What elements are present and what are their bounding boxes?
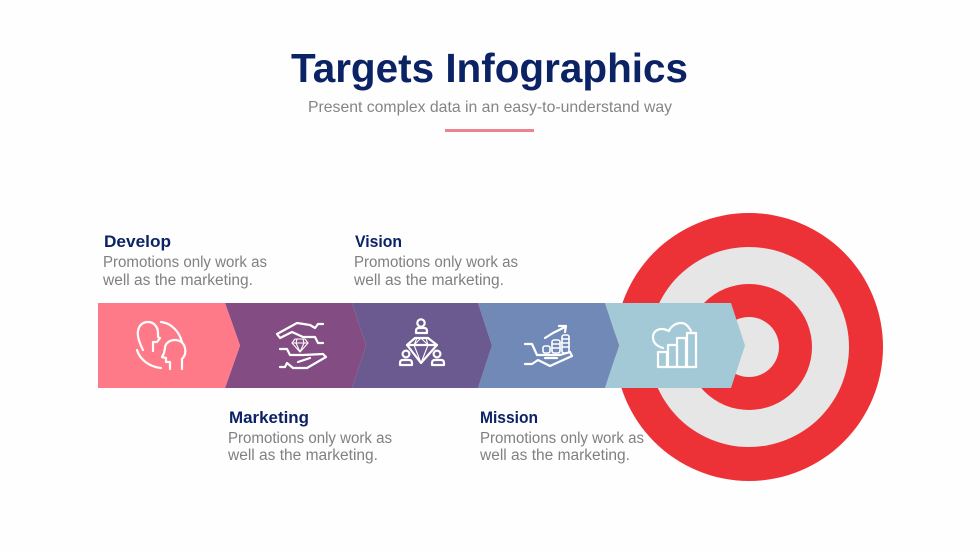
- chevron: step 1: [98, 303, 240, 388]
- text block: Marketing: well as the marketing.: [227, 447, 378, 464]
- text block: Mission: Promotions only work as: [480, 430, 644, 447]
- text block: Develop: Develop: [104, 232, 171, 251]
- chevron: step 2: [225, 303, 366, 388]
- icon: two heads: [137, 322, 185, 369]
- text block: Vision: Vision: [355, 232, 402, 251]
- subtitle: Present complex data in an easy-to-understand way: [308, 99, 672, 116]
- icon: hand with coins and growth arrow: [525, 326, 572, 366]
- chevron: step 5: [605, 303, 745, 388]
- title: Targets Infographics: [291, 45, 688, 91]
- text block: Mission: well as the marketing.: [479, 447, 630, 464]
- text block: Vision: [353, 232, 518, 289]
- text block: Vision: Promotions only work as: [354, 254, 518, 271]
- icon: hands with diamond: [277, 323, 326, 368]
- icon: diamond with people: [400, 319, 444, 365]
- text block: Develop: well as the marketing.: [102, 272, 253, 289]
- text block: Mission: Mission: [480, 408, 538, 427]
- title underline: [445, 129, 534, 132]
- text block: Develop: [102, 232, 267, 289]
- text block: Marketing: Promotions only work as: [228, 430, 392, 447]
- target bullseye: [615, 213, 883, 481]
- icon: cloud with bar chart: [653, 323, 696, 367]
- text block: Marketing: [227, 408, 392, 464]
- text block: Mission: [479, 408, 644, 464]
- text block: Develop: Promotions only work as: [103, 254, 267, 271]
- chevron: step 4: [478, 303, 619, 388]
- text block: Marketing: Marketing: [229, 408, 309, 427]
- chevron: step 3: [352, 303, 492, 388]
- chevron arrow band: [98, 303, 745, 388]
- text block: Vision: well as the marketing.: [353, 272, 504, 289]
